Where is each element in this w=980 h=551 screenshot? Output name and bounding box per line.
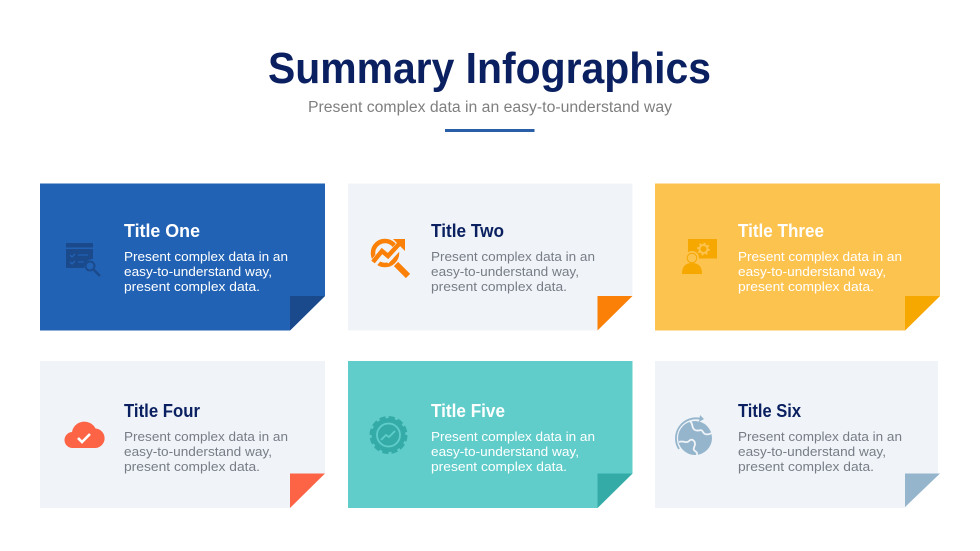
text: title two: easy-to-understand way, bbox=[431, 264, 579, 279]
heading: title three: Title Three bbox=[738, 220, 824, 241]
icon: cloud with check bbox=[64, 422, 105, 448]
text: title four bbox=[124, 429, 288, 474]
heading: title one: Title One bbox=[124, 220, 200, 241]
text: title three: present complex data. bbox=[738, 279, 874, 294]
title underline bbox=[445, 129, 534, 132]
icon: gear with chart line bbox=[372, 418, 406, 452]
icon: presenter with gear screen bbox=[682, 239, 717, 274]
fold corner: four bbox=[290, 474, 325, 508]
text: title five: easy-to-understand way, bbox=[431, 444, 579, 459]
panel: title four bbox=[40, 361, 325, 508]
fold corner: two bbox=[598, 296, 632, 330]
fold corner: five bbox=[598, 474, 632, 508]
text: title six: present complex data. bbox=[738, 459, 874, 474]
text: title five: Present complex data in an bbox=[431, 429, 595, 444]
icon: puzzle globe bbox=[676, 415, 712, 455]
text: title one bbox=[124, 249, 288, 294]
icon: magnifier with growth arrow bbox=[373, 239, 408, 276]
text: title two bbox=[431, 249, 595, 294]
panel: title six bbox=[655, 361, 940, 508]
heading: title six: Title Six bbox=[738, 400, 802, 421]
heading: title four: Title Four bbox=[124, 400, 200, 421]
text: title two: present complex data. bbox=[431, 279, 567, 294]
text: title five bbox=[431, 429, 595, 474]
text: title five: present complex data. bbox=[431, 459, 567, 474]
text: title four: Present complex data in an bbox=[124, 429, 288, 444]
panel: title two bbox=[348, 184, 632, 330]
text: title one: present complex data. bbox=[124, 279, 260, 294]
fold corner: one bbox=[290, 296, 325, 330]
heading: title five: Title Five bbox=[431, 400, 505, 421]
text: title four: present complex data. bbox=[124, 459, 260, 474]
icon: checklist with magnifier bbox=[66, 243, 100, 276]
text: title six: easy-to-understand way, bbox=[738, 444, 886, 459]
fold corner: three bbox=[905, 296, 940, 330]
text: title one: Present complex data in an bbox=[124, 249, 288, 264]
text: title three: easy-to-understand way, bbox=[738, 264, 886, 279]
text: title two: Present complex data in an bbox=[431, 249, 595, 264]
text: title three: Present complex data in an bbox=[738, 249, 902, 264]
text: title six bbox=[738, 429, 902, 474]
subtitle: Present complex data in an easy-to-understand way bbox=[308, 99, 672, 116]
panel: title three bbox=[655, 184, 940, 330]
fold corner: six bbox=[905, 474, 940, 507]
text: title three bbox=[738, 249, 902, 294]
title: Summary Infographics bbox=[268, 44, 711, 93]
text: title six: Present complex data in an bbox=[738, 429, 902, 444]
text: title one: easy-to-understand way, bbox=[124, 264, 272, 279]
text: title four: easy-to-understand way, bbox=[124, 444, 272, 459]
panel: title one bbox=[40, 184, 325, 330]
panel: title five bbox=[348, 361, 632, 508]
heading: title two: Title Two bbox=[431, 220, 504, 241]
